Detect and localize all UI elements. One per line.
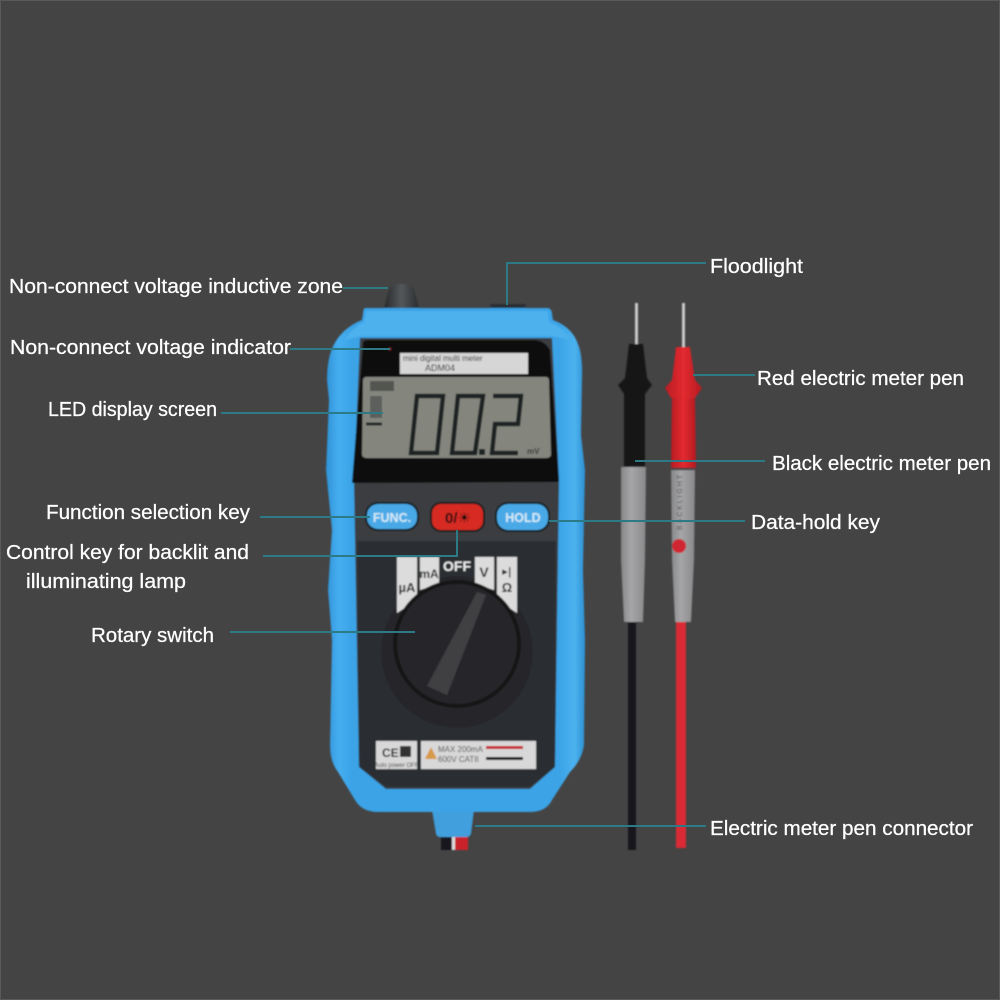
casing top ledge highlight [345, 311, 570, 340]
backlight button [430, 502, 485, 532]
icon: non-contact voltage sensor tip [384, 284, 419, 308]
unit mV: mV [527, 447, 540, 456]
label: inductive zone: Non-connect voltage inductive zone [9, 276, 343, 298]
lower face recess [357, 541, 556, 787]
range label OFF: OFF [443, 558, 471, 574]
label: function key: Function selection key [46, 502, 250, 524]
display bezel [352, 340, 559, 483]
LCD readout 00.2 [366, 381, 521, 455]
LCD screen [362, 377, 551, 458]
leader: voltage indicator [290, 348, 390, 350]
backlight button: 0/☀ [445, 510, 471, 527]
icon: pen connector with wires [432, 810, 474, 850]
range label uA: µA [399, 580, 416, 595]
HOLD button [495, 502, 550, 532]
label: black pen: Black electric meter pen [772, 453, 991, 475]
leader: pen connector [475, 825, 706, 827]
label: voltage indicator: Non-connect voltage indicator [10, 337, 291, 359]
label: backlight key [6, 542, 249, 593]
CE label: CE [382, 746, 399, 760]
leader: red pen [693, 374, 755, 376]
icon: floodlight bump [490, 304, 526, 309]
red test pen [665, 303, 702, 848]
leader: backlight key [263, 530, 457, 556]
warning rating label [421, 741, 536, 769]
label: rotary switch: Rotary switch [91, 625, 214, 647]
range label mA: mA [419, 567, 439, 581]
FUNC button [365, 502, 419, 531]
leader: rotary switch [230, 631, 415, 633]
multimeter device [326, 284, 585, 850]
label: backlight key: Control key for backlit and [6, 542, 249, 564]
model label: ADM04 [425, 363, 455, 373]
leader: LED screen [221, 412, 383, 414]
range label uA [397, 557, 417, 613]
range label V [475, 557, 494, 590]
model label [400, 353, 528, 374]
meter dark face panel [354, 338, 559, 789]
label: LED screen: LED display screen [48, 399, 217, 421]
black test pen [618, 303, 652, 850]
label: pen connector: Electric meter pen connector [710, 818, 973, 840]
leader: data hold [549, 520, 745, 522]
HOLD button: HOLD [505, 511, 541, 525]
range label ohm: ▸| [502, 565, 512, 578]
model label: mini digital multi meter [403, 354, 483, 363]
leader: black pen [635, 460, 765, 462]
range label V: V [479, 564, 489, 580]
rotary dial [393, 580, 521, 708]
leader: function key [260, 516, 370, 518]
label: backlight key: illuminating lamp [26, 571, 186, 593]
warning rating label: 600V CATII [438, 755, 479, 764]
label: red pen: Red electric meter pen [757, 368, 964, 390]
indicator LED [388, 348, 392, 350]
rotary recess [381, 576, 533, 728]
label: floodlight: Floodlight [710, 256, 803, 278]
leader lines [221, 263, 765, 826]
warning rating label: MAX 200mA [438, 745, 484, 754]
meter blue casing [326, 308, 585, 812]
range label ohm: Ω [502, 580, 512, 595]
leader: inductive zone [343, 287, 388, 289]
CE label [374, 741, 419, 769]
red test pen: BACKLIGHT [677, 474, 684, 530]
CE label: Auto power OFF [374, 763, 419, 769]
range label mA [419, 557, 439, 590]
leader: floodlight [507, 263, 706, 305]
range label ohm [497, 557, 517, 613]
label: data hold: Data-hold key [751, 512, 880, 534]
FUNC button: FUNC. [373, 511, 411, 525]
